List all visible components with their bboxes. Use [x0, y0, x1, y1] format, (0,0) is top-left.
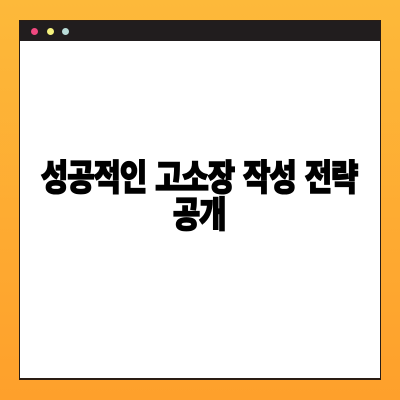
title — [40, 159, 358, 236]
window title bar — [20, 21, 380, 41]
icon: pink window dot — [31, 28, 38, 35]
icon: pale blue window dot — [62, 28, 69, 35]
title: 공개 — [173, 196, 225, 236]
title: 성공적인 고소장 작성 전략 — [41, 159, 357, 198]
icon: yellow window dot — [47, 28, 54, 35]
